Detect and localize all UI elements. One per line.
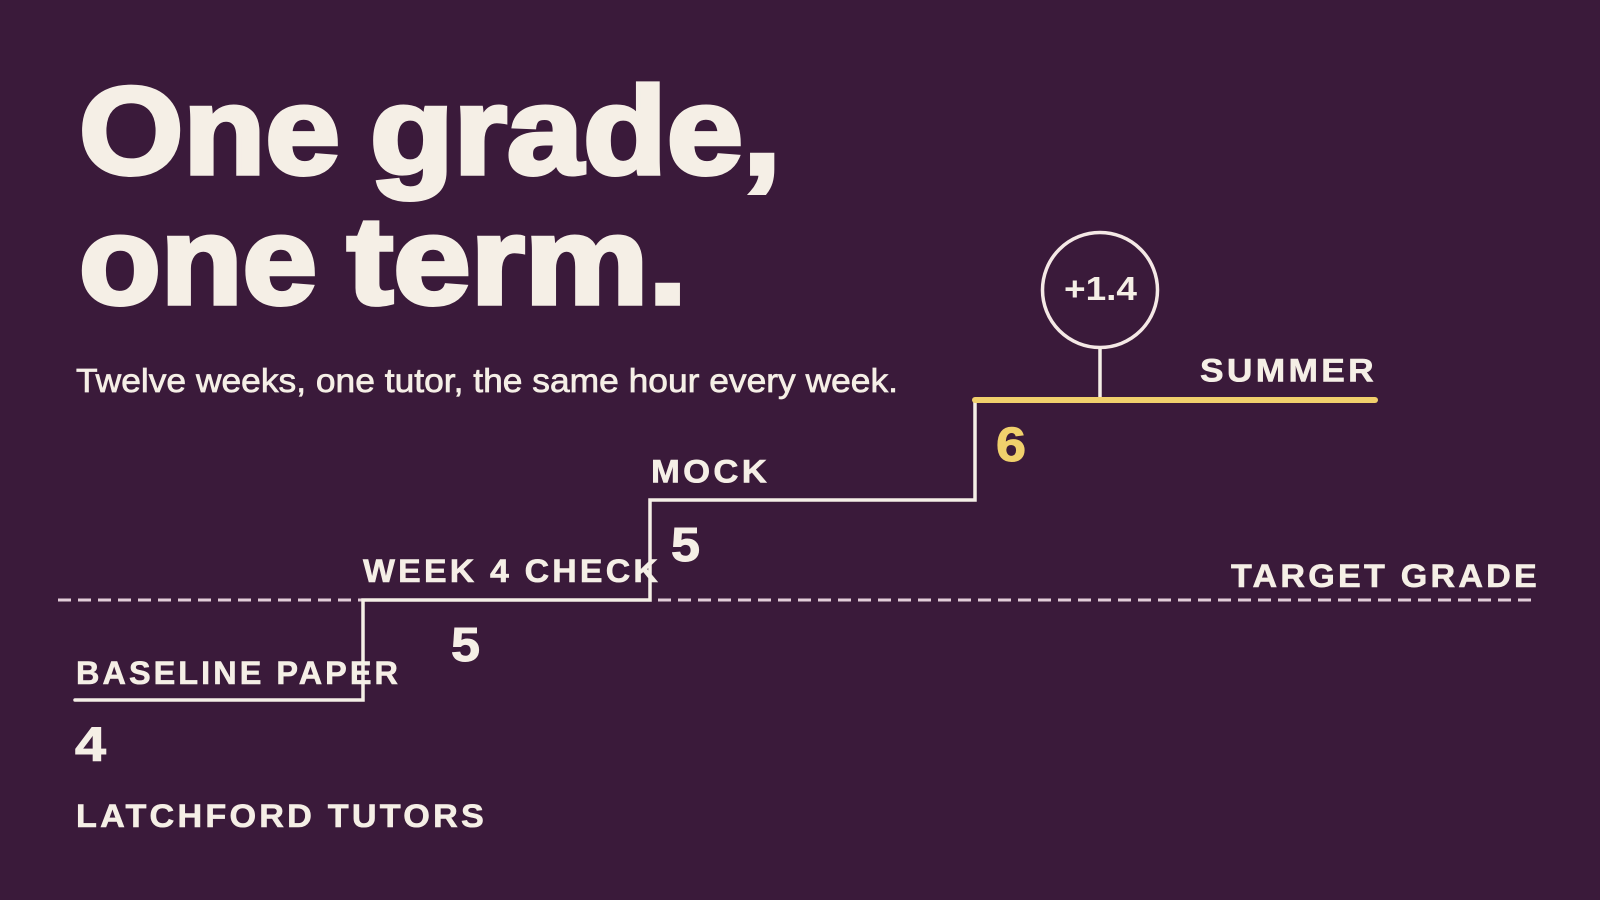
title: grade,: [370, 62, 781, 200]
step: week 4 check: 5: [451, 619, 480, 672]
step: week 4 check: [363, 553, 661, 672]
step: mock: MOCK: [651, 454, 770, 490]
subtitle: Twelve weeks, one tutor, the same hour every week.: [76, 362, 898, 399]
target grade dashed line: [58, 598, 1531, 602]
title: one: [79, 192, 317, 330]
target grade label: TARGET GRADE: [1231, 558, 1540, 594]
callout: +1.4 gain: [1042, 232, 1158, 397]
title: [79, 62, 781, 330]
callout: +1.4 gain: +1.4: [1064, 270, 1138, 307]
step: baseline paper: [75, 655, 401, 772]
step: baseline paper: BASELINE PAPER: [76, 655, 401, 691]
title: term.: [347, 192, 687, 330]
step: summer: SUMMER: [1200, 352, 1377, 388]
step line chart: [75, 400, 1375, 700]
step: summer: [996, 352, 1377, 472]
brand: LATCHFORD TUTORS: [76, 798, 487, 834]
title: One: [79, 62, 340, 200]
summer step highlight: [975, 397, 1375, 403]
step: week 4 check: WEEK 4 CHECK: [363, 553, 661, 589]
step: mock: 5: [671, 519, 700, 572]
step: baseline paper: 4: [75, 719, 106, 772]
step: summer: 6: [996, 419, 1026, 472]
step: mock: [651, 454, 770, 572]
